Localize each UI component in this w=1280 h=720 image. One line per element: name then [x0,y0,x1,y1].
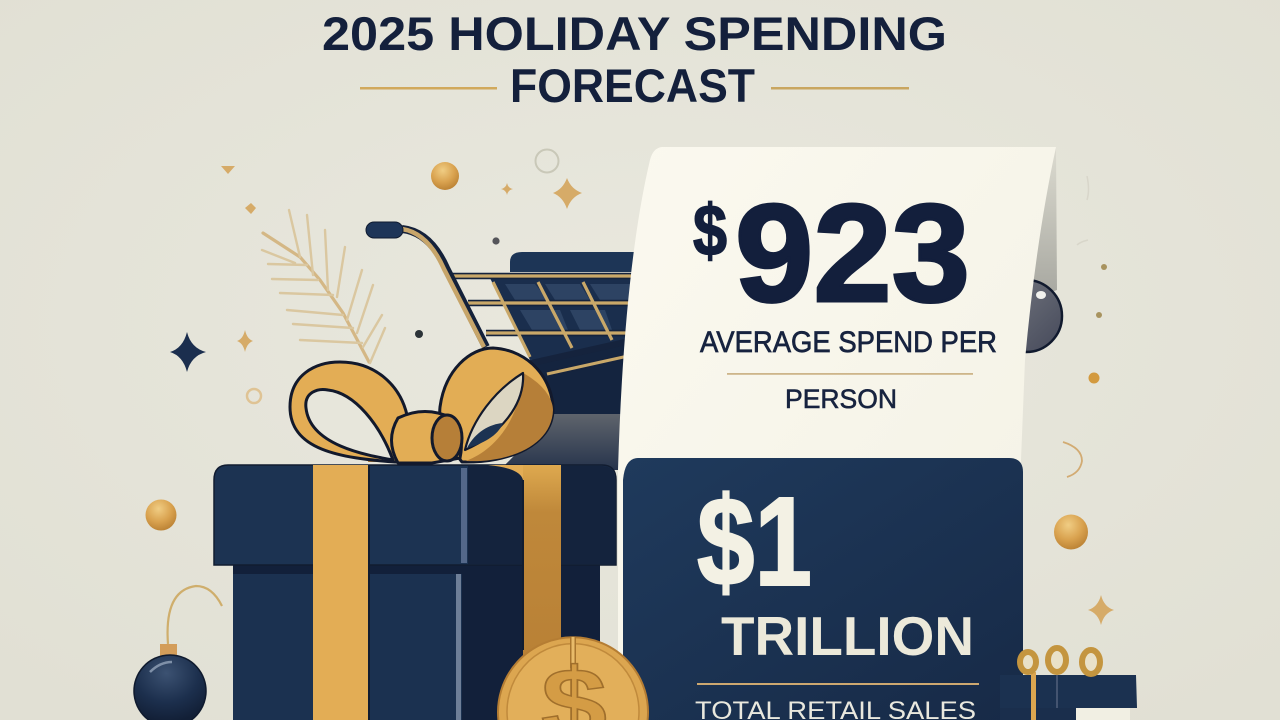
stat: $923: $ [693,191,727,271]
stat: trillion: TRILLION [721,605,974,667]
faint curl [1077,176,1088,245]
icon: ribbon bow [290,348,553,463]
gold bauble left [146,500,176,530]
gift ribbon [313,465,369,720]
title: FORECAST [510,59,755,112]
receipt fold [1030,148,1057,300]
label: average spend per person [700,326,997,414]
icon: ornament [134,586,222,720]
small gold dot right [1088,372,1100,384]
icon: coin [498,637,648,720]
decorative sparkles [221,166,1114,625]
card rule [697,683,979,685]
icon: small gift [1000,648,1137,720]
bauble behind receipt [990,280,1062,352]
gift body [233,562,600,720]
title rule left [360,87,497,90]
panel: retail sales card [623,458,1023,720]
icon: navy star [170,332,206,372]
bow shadow [368,434,396,462]
title [322,7,947,112]
ring left [247,389,261,403]
title rule right [771,87,909,90]
icon: gift box [214,465,616,720]
label: average spend per person: AVERAGE SPEND PER [700,326,997,359]
icon: feather [262,210,385,363]
gold bauble top [431,162,459,190]
left loop [290,362,420,463]
gold bauble right [1054,514,1088,550]
centre knot [392,412,461,463]
stat: $923: 923 [735,176,970,331]
cart basket [510,252,636,272]
icon: shopping cart [366,222,636,470]
cart arm [402,229,486,347]
cart rails [448,276,636,374]
title: 2025 HOLIDAY SPENDING [322,7,947,60]
right loop [440,348,553,462]
crescent [1063,442,1082,477]
label: average spend per person: PERSON [785,384,897,414]
stat: $1: $1 [697,471,812,612]
cart grip [366,222,403,238]
ring top [536,150,558,172]
small dots [415,237,1107,338]
gift lid [214,465,616,565]
panel: receipt [618,147,1056,720]
